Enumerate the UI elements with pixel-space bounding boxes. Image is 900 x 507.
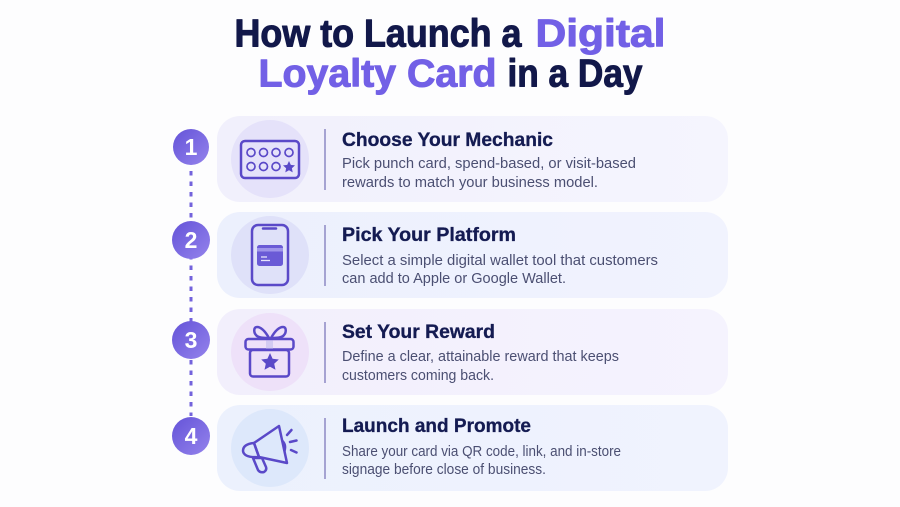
step number 3: 3 xyxy=(185,327,197,353)
panel: step 1 choose your mechanic xyxy=(173,116,728,202)
title: Loyalty Card xyxy=(258,52,496,96)
card background 1 xyxy=(217,116,728,202)
icon: punch card xyxy=(231,120,309,198)
description 1 xyxy=(342,156,636,191)
divider 3 xyxy=(324,322,326,383)
divider 1 xyxy=(324,129,326,190)
description 4: signage before close of business. xyxy=(342,462,546,478)
panel: step 2 pick your platform xyxy=(172,212,728,298)
heading 3: Set Your Reward xyxy=(342,322,495,343)
description 3 xyxy=(342,349,619,384)
heading 2: Pick Your Platform xyxy=(342,225,516,246)
description 1: rewards to match your business model. xyxy=(342,175,598,191)
step number 3 xyxy=(172,321,210,359)
panel: step 4 launch and promote xyxy=(172,405,728,491)
description 2: can add to Apple or Google Wallet. xyxy=(342,271,566,287)
dotted connector line xyxy=(190,171,192,416)
panel: step 3 set your reward xyxy=(172,309,728,395)
step number 2: 2 xyxy=(185,227,197,253)
heading 1: Choose Your Mechanic xyxy=(342,130,553,151)
card background 2 xyxy=(217,212,728,298)
description 4: Share your card via QR code, link, and in-store xyxy=(342,444,621,460)
card background 3 xyxy=(217,309,728,395)
description 2: Select a simple digital wallet tool that customers xyxy=(342,253,658,269)
icon: megaphone xyxy=(231,409,309,487)
divider 2 xyxy=(324,225,326,286)
step number 1: 1 xyxy=(185,134,198,160)
title: How to Launch a xyxy=(234,12,522,56)
description 2 xyxy=(342,253,658,287)
divider 4 xyxy=(324,418,326,479)
description 4 xyxy=(342,444,621,478)
step number 4: 4 xyxy=(185,423,198,449)
step number 1 xyxy=(173,129,209,165)
step number 2 xyxy=(172,221,210,259)
title: Digital xyxy=(536,12,666,56)
description 3: customers coming back. xyxy=(342,368,494,384)
heading 4: Launch and Promote xyxy=(342,416,531,437)
title xyxy=(234,12,666,96)
icon: gift box with star xyxy=(231,313,309,391)
card background 4 xyxy=(217,405,728,491)
icon: phone with card xyxy=(231,216,309,294)
title: in a Day xyxy=(508,52,643,96)
step number 4 xyxy=(172,417,210,455)
description 1: Pick punch card, spend-based, or visit-based xyxy=(342,156,636,172)
description 3: Define a clear, attainable reward that keeps xyxy=(342,349,619,365)
